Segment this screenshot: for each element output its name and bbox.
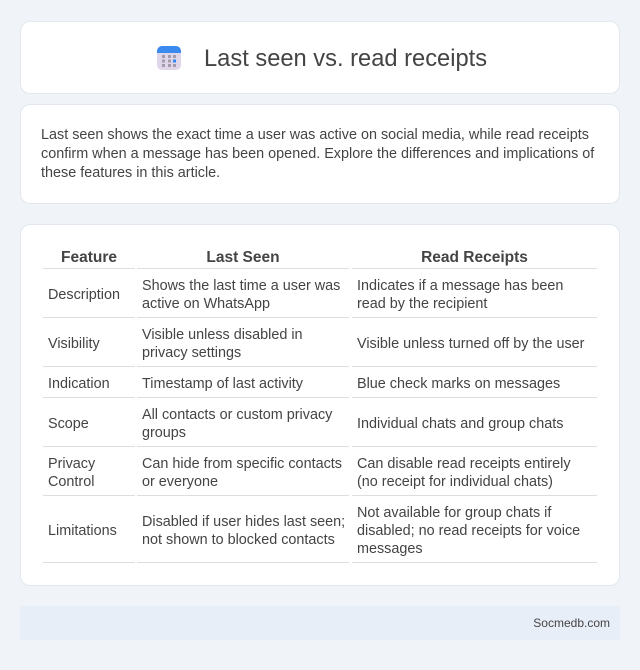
header row: Feature — [61, 249, 117, 266]
row: limitations: messages — [357, 541, 423, 557]
row: indication: Timestamp of last activity — [142, 376, 303, 392]
intro text: confirm when a message has been opened. Explore the differences and implications of — [41, 146, 594, 162]
icon: calendar — [157, 46, 181, 70]
row: scope: Individual chats and group chats — [357, 416, 563, 432]
row: visibility: Visible unless turned off by the user — [357, 336, 584, 352]
intro card — [20, 104, 620, 204]
row: scope: All contacts or custom privacy — [142, 407, 332, 423]
intro text: Last seen shows the exact time a user was active on social media, while read receipts — [41, 126, 589, 142]
intro text — [41, 126, 594, 181]
row: visibility: Visible unless disabled in — [142, 327, 303, 343]
row: visibility: privacy settings — [142, 345, 241, 361]
row: visibility — [48, 327, 584, 361]
row: privacy control: Privacy — [48, 456, 95, 472]
title card — [20, 21, 620, 94]
row: privacy control — [48, 456, 571, 490]
row: indication — [48, 376, 560, 392]
header row — [61, 249, 528, 266]
footer bar — [20, 606, 620, 640]
row: privacy control: or everyone — [142, 474, 218, 490]
row: scope — [48, 407, 563, 441]
row: description: Shows the last time a user was — [142, 278, 340, 294]
row: scope: Scope — [48, 416, 89, 432]
row: limitations: not shown to blocked contacts — [142, 532, 335, 548]
intro text: these features in this article. — [41, 165, 220, 181]
row: visibility: Visibility — [48, 336, 100, 352]
row: limitations: Disabled if user hides last seen; — [142, 514, 345, 530]
row: scope: groups — [142, 425, 186, 441]
row: indication: Indication — [48, 376, 110, 392]
header row: Last Seen — [206, 249, 280, 266]
row: description: read by the recipient — [357, 296, 487, 312]
row: privacy control: Control — [48, 474, 94, 490]
row: privacy control: Can hide from specific contacts — [142, 456, 342, 472]
table — [43, 249, 597, 563]
row: limitations: disabled; no read receipts for voice — [357, 523, 580, 539]
row: privacy control: (no receipt for individual chats) — [357, 474, 553, 490]
row: indication: Blue check marks on messages — [357, 376, 560, 392]
row: limitations: Not available for group chats if — [357, 505, 551, 521]
heading: Last seen vs. read receipts — [204, 46, 487, 72]
row: limitations — [48, 505, 580, 557]
row: privacy control: Can disable read receipts entirely — [357, 456, 571, 472]
table card — [20, 224, 620, 586]
row: description: active on WhatsApp — [142, 296, 270, 312]
row: description — [48, 278, 563, 312]
row: limitations: Limitations — [48, 523, 117, 539]
row: description: Description — [48, 287, 120, 303]
row: description: Indicates if a message has been — [357, 278, 563, 294]
header row: Read Receipts — [421, 249, 528, 266]
footer text: Socmedb.com — [533, 616, 610, 630]
